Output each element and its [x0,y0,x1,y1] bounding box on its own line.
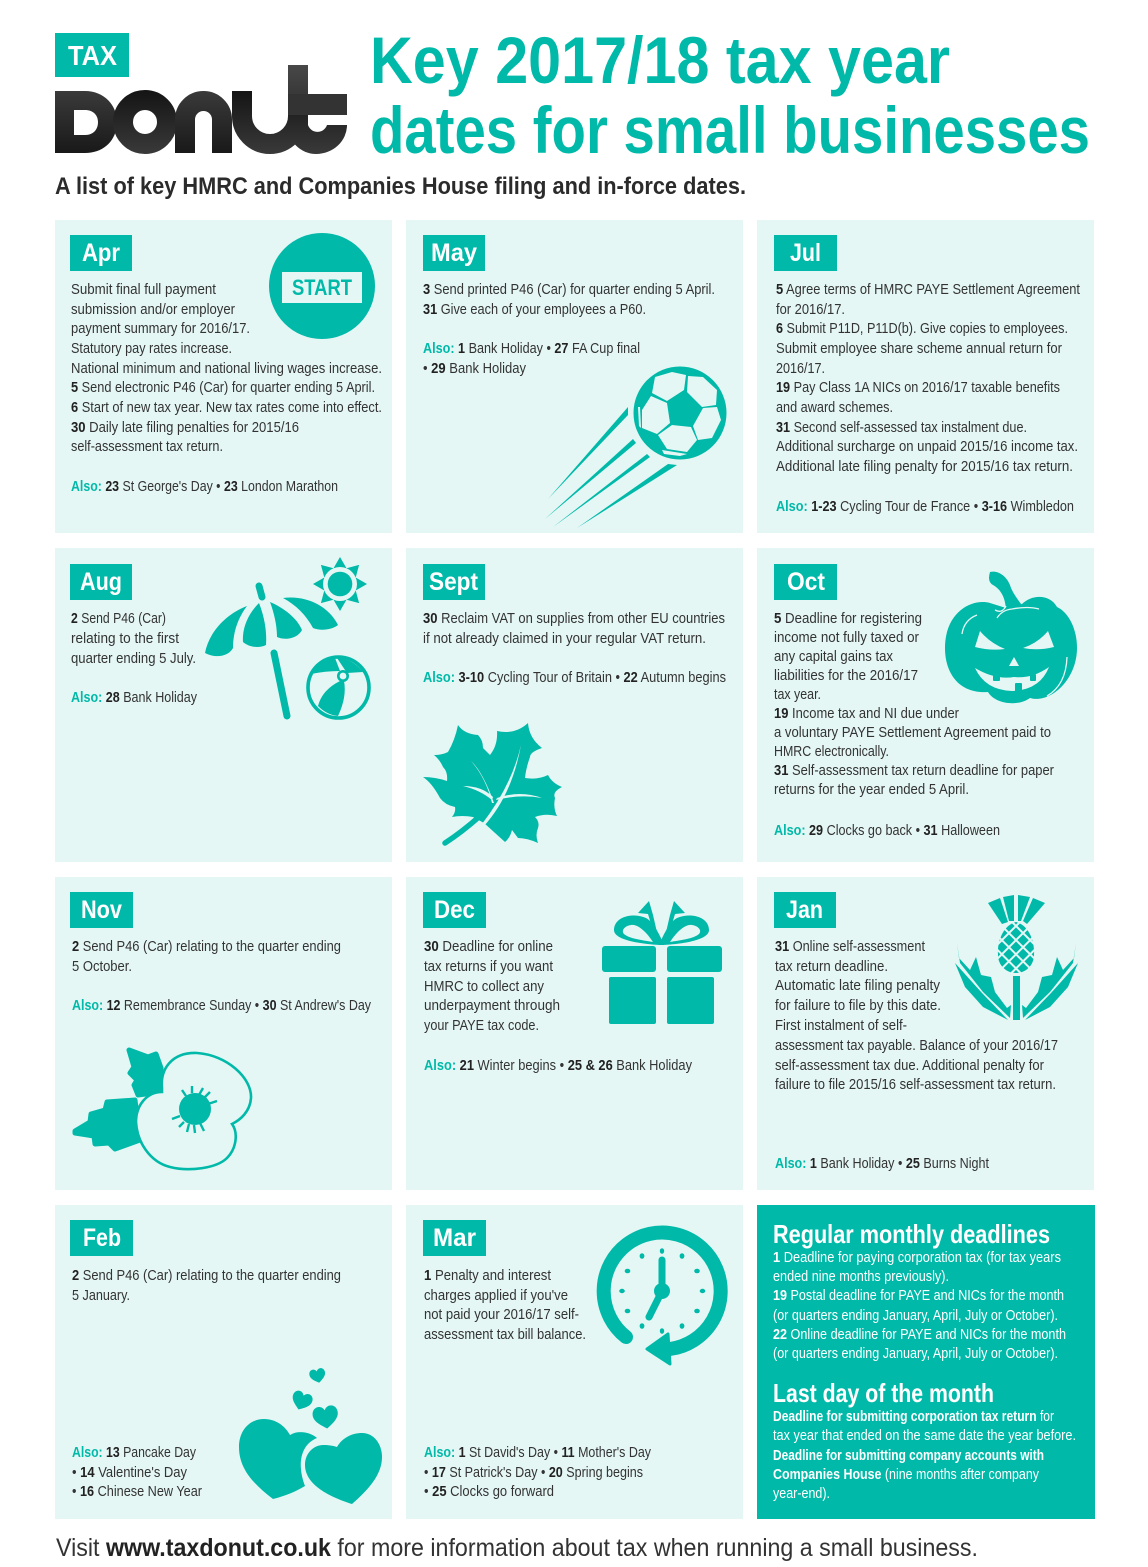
panel: May [406,220,743,533]
text: January dates: First instalment of self- [775,1018,907,1034]
text: April dates: 6 Start of new tax year. New tax rates come into effect. [71,400,382,416]
month tab: Mar: Mar [433,1224,476,1252]
icon: maple leaf [423,723,562,843]
text: July dates: Additional late filing penalty for 2015/16 tax return. [776,459,1073,475]
month tab: Apr [70,235,132,271]
text: December dates: Also: 21 Winter begins • 25 & 26 Bank Holiday [424,1058,693,1074]
heading: regular monthly deadlines: Regular monthly deadlines [773,1219,1050,1249]
text: October dates: 31 Self-assessment tax return deadline for paper [774,763,1054,779]
text: August dates [71,611,198,706]
text: July dates: Also: 1-23 Cycling Tour de France • 3-16 Wimbledon [776,499,1074,515]
month tab: Jul [774,235,837,271]
panel: September [406,548,743,862]
text: October dates: Also: 29 Clocks go back • 31 Halloween [774,823,1000,839]
text: October dates [774,611,1054,839]
text: monthly deadlines: (or quarters ending January, April, July or October). [773,1308,1058,1324]
text: March dates: assessment tax bill balance. [424,1327,586,1343]
text: January dates: Automatic late filing penalty [775,978,941,994]
panel: July [757,220,1094,533]
panel: February [55,1205,392,1519]
text: September dates: 30 Reclaim VAT on supplies from other EU countries [423,611,725,627]
month tab: Dec [423,892,486,928]
text: October dates: 5 Deadline for registering [774,611,922,627]
text: March dates: not paid your 2016/17 self- [424,1307,579,1323]
text: February dates: 2 Send P46 (Car) relating to the quarter ending [72,1268,341,1284]
icon: hearts [239,1367,382,1504]
text: March dates [424,1268,652,1500]
text: monthly deadlines: 22 Online deadline for PAYE and NICs for the month [773,1327,1066,1343]
text: October dates: tax year. [774,687,821,703]
panel: April [55,220,392,533]
month tab: Oct [774,564,837,600]
month tab: May [423,235,485,271]
text: last day deadlines: tax year that ended on the same date the year before. [773,1428,1076,1444]
text: July dates: 6 Submit P11D, P11D(b). Give copies to employees. [776,321,1068,337]
month tab: Jul: Jul [790,239,821,267]
text: monthly deadlines: 1 Deadline for paying corporation tax (for tax years [773,1250,1061,1266]
text: December dates: your PAYE tax code. [424,1018,539,1034]
text: April dates [71,282,382,495]
text: August dates: 2 Send P46 (Car) [71,611,166,627]
month tab: Jan [774,892,836,928]
text: December dates: underpayment through [424,998,560,1014]
text: January dates: self-assessment tax due. Additional penalty for [775,1058,1044,1074]
text: February dates: • 16 Chinese New Year [72,1484,202,1500]
logo: Tax Donut: TAX [68,40,117,71]
text: April dates: payment summary for 2016/17. [71,321,250,337]
text: May dates [423,282,715,377]
text: November dates: 2 Send P46 (Car) relating to the quarter ending [72,939,341,955]
month tab: Dec: Dec [434,896,475,924]
text: February dates: • 14 Valentine's Day [72,1465,188,1481]
text: March dates: • 17 St Patrick's Day • 20 Spring begins [424,1465,643,1481]
text: monthly deadlines [773,1250,1066,1362]
icon: start badge [269,233,375,339]
text: January dates: assessment tax payable. Balance of your 2016/17 [775,1038,1058,1054]
text: last day deadlines: Companies House (nine months after company [773,1467,1040,1483]
text: September dates: Also: 3-10 Cycling Tour of Britain • 22 Autumn begins [423,670,726,686]
text: November dates: Also: 12 Remembrance Sunday • 30 St Andrew's Day [72,998,372,1014]
text: October dates: income not fully taxed or [774,630,919,646]
text: October dates: 19 Income tax and NI due under [774,706,959,722]
text: September dates: if not already claimed in your regular VAT return. [423,631,706,647]
text: October dates: any capital gains tax [774,649,894,665]
text: July dates: 5 Agree terms of HMRC PAYE Settlement Agreement [776,282,1080,298]
text: December dates: HMRC to collect any [424,979,545,995]
text: May dates: • 29 Bank Holiday [423,361,527,377]
text: August dates: quarter ending 5 July. [71,651,196,667]
icon: start badge: START [292,275,352,300]
text: July dates: Additional surcharge on unpaid 2015/16 income tax. [776,439,1078,455]
month tab: Aug: Aug [80,568,122,596]
text: January dates: 31 Online self-assessment [775,939,925,955]
text: September dates [423,611,726,686]
text: February dates: 5 January. [72,1288,130,1304]
icon: football [545,366,726,528]
month tab: Sept [423,564,485,600]
text: July dates: and award schemes. [776,400,893,416]
panel: October [757,548,1094,862]
text: February dates: Also: 13 Pancake Day [72,1445,197,1461]
text: November dates [72,939,372,1014]
text: May dates: 31 Give each of your employees a P60. [423,302,646,318]
month tab: Feb [70,1220,133,1256]
text: October dates: returns for the year ended 5 April. [774,782,969,798]
text: March dates: • 25 Clocks go forward [424,1484,554,1500]
text: April dates: 5 Send electronic P46 (Car) for quarter ending 5 April. [71,380,375,396]
text: monthly deadlines: ended nine months previously). [773,1269,949,1285]
text: March dates: 1 Penalty and interest [424,1268,551,1284]
text: August dates: Also: 28 Bank Holiday [71,690,198,706]
text: last day deadlines: Deadline for submitting corporation tax return for [773,1409,1054,1425]
text: July dates: Submit employee share scheme annual return for [776,341,1062,357]
text: December dates: tax returns if you want [424,959,553,975]
footer: Visit www.taxdonut.co.uk for more information about tax when running a small business. [56,1534,978,1562]
panel: January [757,877,1094,1190]
text: January dates: for failure to file by this date. [775,998,941,1014]
text: April dates: self-assessment tax return. [71,439,223,455]
text: January dates: tax return deadline. [775,959,888,975]
icon: beach umbrella [205,586,338,716]
month tab: May: May [431,239,477,267]
icon: poppy [75,1050,251,1169]
title [370,23,1090,167]
text: January dates: Also: 1 Bank Holiday • 25 Burns Night [775,1156,989,1172]
month tab: Mar [423,1220,486,1256]
text: November dates: 5 October. [72,959,132,975]
text: March dates: charges applied if you've [424,1288,568,1304]
panel: August [55,548,392,862]
panel: March [406,1205,743,1519]
logo: Tax Donut [55,33,347,154]
month tab: Nov [70,892,133,928]
text: October dates: a voluntary PAYE Settlement Agreement paid to [774,725,1051,741]
text: July dates: 31 Second self-assessed tax instalment due. [776,420,1027,436]
text: April dates: 30 Daily late filing penalties for 2015/16 [71,420,299,436]
text: April dates: Statutory pay rates increase. [71,341,232,357]
text: October dates: HMRC electronically. [774,744,889,760]
month tab: Oct: Oct [787,568,826,596]
title: Key 2017/18 tax year [370,23,950,97]
text: July dates: 19 Pay Class 1A NICs on 2016/17 taxable benefits [776,380,1060,396]
text: January dates: failure to file 2015/16 self-assessment tax return. [775,1077,1056,1093]
text: December dates [424,939,693,1074]
month tab: Sept: Sept [429,568,479,596]
text: monthly deadlines: 19 Postal deadline for PAYE and NICs for the month [773,1288,1064,1304]
text: April dates: submission and/or employer [71,302,235,318]
text: April dates: Submit final full payment [71,282,216,298]
month tab: Jan: Jan [786,896,823,924]
text: last day deadlines [773,1409,1076,1502]
text: December dates: 30 Deadline for online [424,939,553,955]
text: July dates: for 2016/17. [776,302,845,318]
text: March dates: Also: 1 St David's Day • 11 Mother's Day [424,1445,652,1461]
text: May dates: Also: 1 Bank Holiday • 27 FA Cup final [423,341,640,357]
text: April dates: Also: 23 St George's Day • 23 London Marathon [71,479,338,495]
month tab: Nov: Nov [81,896,122,924]
heading: last day of the month: Last day of the month [773,1378,994,1408]
month tab: Feb: Feb [83,1224,121,1252]
icon: clock with arrow [604,1233,721,1364]
text: last day deadlines: Deadline for submitting company accounts with [773,1448,1044,1464]
text: monthly deadlines: (or quarters ending January, April, July or October). [773,1346,1058,1362]
icon: pumpkin [945,572,1077,703]
text: July dates [776,282,1080,515]
panel: November [55,877,392,1190]
icon: thistle [955,895,1078,1020]
panel: December [406,877,743,1190]
text: February dates [72,1268,341,1500]
text: August dates: relating to the first [71,631,179,647]
text: October dates: liabilities for the 2016/17 [774,668,918,684]
panel: regular deadlines [757,1205,1095,1519]
month tab: Aug [70,564,132,600]
text: January dates [775,939,1058,1172]
text: April dates: National minimum and national living wages increase. [71,361,382,377]
icon: beach ball [308,657,369,718]
subtitle: A list of key HMRC and Companies House filing and in-force dates. [55,173,746,200]
icon: gift box [602,901,722,1024]
month tab: Apr: Apr [82,239,120,267]
text: May dates: 3 Send printed P46 (Car) for quarter ending 5 April. [423,282,715,298]
text: last day deadlines: year-end). [773,1486,830,1502]
text: July dates: 2016/17. [776,361,825,377]
icon: sun [313,557,367,611]
